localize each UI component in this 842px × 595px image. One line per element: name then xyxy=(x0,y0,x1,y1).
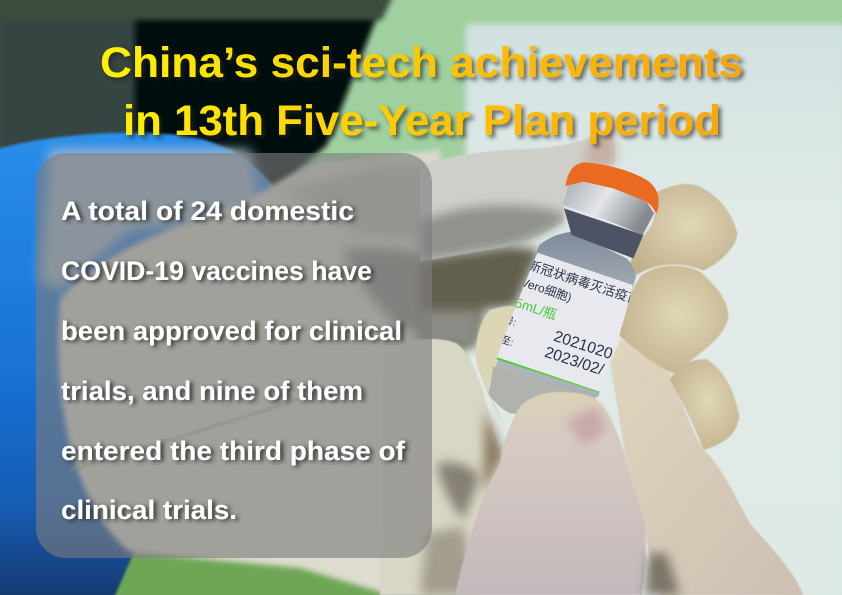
panel background xyxy=(36,153,432,558)
lower left slate xyxy=(385,555,425,595)
title xyxy=(100,39,743,145)
grey palm xyxy=(420,310,480,347)
label text: 效期至: xyxy=(480,326,515,349)
thumb pink mark xyxy=(567,407,607,447)
glove palm under panel xyxy=(58,150,450,595)
pale blue glove highlight xyxy=(40,150,262,290)
green bottom strip xyxy=(100,540,420,595)
lower centre thumb xyxy=(455,392,646,595)
vial orange cap xyxy=(565,162,659,214)
dark palm xyxy=(420,245,540,347)
label text: (Vero细胞) xyxy=(515,274,573,305)
blue sleeve xyxy=(0,133,300,595)
finger behind vial left xyxy=(476,306,515,427)
vial neck xyxy=(564,208,643,258)
glove top shadow xyxy=(280,165,432,240)
title: China’s sci-tech achievements xyxy=(100,39,743,87)
label green band xyxy=(496,358,600,392)
big lower thumb right xyxy=(610,340,803,595)
panel body text: trials, and nine of them xyxy=(61,376,363,406)
title: in 13th Five-Year Plan period xyxy=(123,97,721,145)
panel body text: been approved for clinical xyxy=(61,316,402,346)
dark background left xyxy=(0,0,150,160)
finger 3 xyxy=(670,359,739,450)
glove shadow patch xyxy=(340,248,445,330)
glove fingertip xyxy=(583,135,615,166)
shadow between thumbs xyxy=(645,553,680,595)
olive strip top edge xyxy=(0,0,396,20)
label text xyxy=(502,260,631,374)
vial crimp xyxy=(563,182,654,235)
vial glass body xyxy=(488,232,636,413)
label text: 0.5mL/瓶 xyxy=(503,292,559,323)
black shadow xyxy=(135,14,378,190)
label text: 批号: xyxy=(492,310,518,329)
lower left finger xyxy=(380,339,503,595)
glove crease xyxy=(70,385,340,470)
upper glove finger xyxy=(420,131,615,262)
vial lower glass xyxy=(490,367,597,417)
finger shadow patch xyxy=(437,462,480,520)
panel body text: COVID-19 vaccines have xyxy=(61,256,372,286)
label paper xyxy=(496,252,632,392)
panel body text: clinical trials. xyxy=(61,495,237,525)
glove finger shadow xyxy=(420,205,564,262)
hand and vial xyxy=(380,131,803,595)
label text: 新冠状病毒灭活疫苗 xyxy=(526,257,642,308)
text panel xyxy=(36,153,432,558)
panel body text: A total of 24 domestic xyxy=(61,196,354,226)
label text: 20210201 xyxy=(551,328,623,366)
white cloth xyxy=(466,24,842,595)
lower finger base xyxy=(420,527,477,595)
panel body text xyxy=(61,196,406,525)
finger 1 xyxy=(630,184,737,275)
finger 2 xyxy=(620,266,728,373)
finger edge shadow xyxy=(483,410,503,493)
vial label xyxy=(496,252,632,392)
panel body text: entered the third phase of xyxy=(61,436,406,466)
label text: 2023/02/ xyxy=(542,344,606,379)
